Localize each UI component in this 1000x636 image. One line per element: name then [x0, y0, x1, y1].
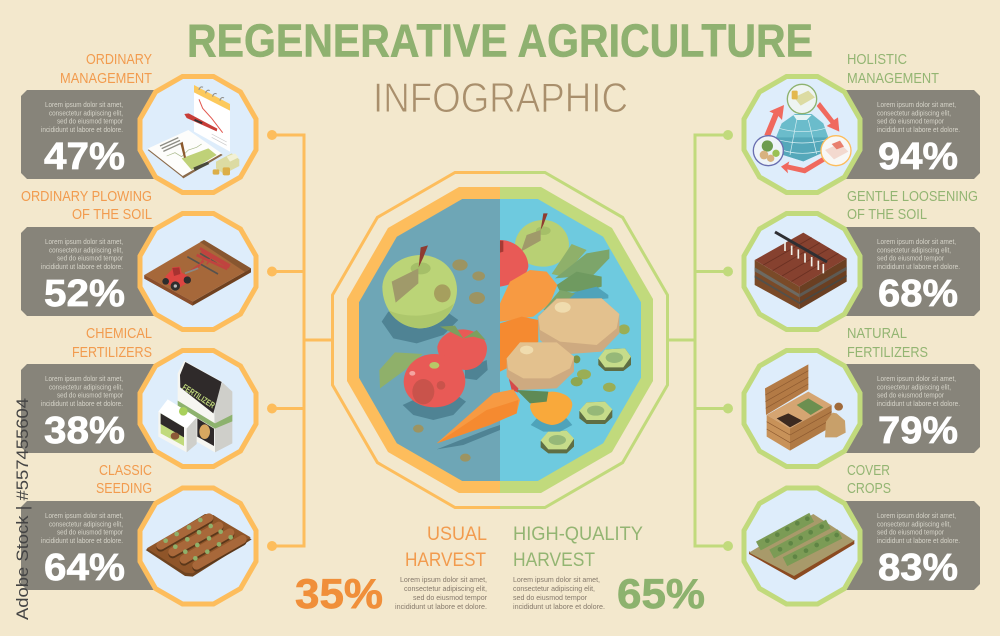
percentage: 52%: [44, 273, 125, 315]
icon frame: [744, 214, 860, 330]
icon: fertilizer bag and jug: FERTILIZER: [181, 382, 217, 411]
label: MANAGEMENT: [847, 71, 939, 87]
grey card: [21, 364, 160, 453]
icon: soil block with rake: [755, 232, 847, 309]
icon: tractor plowing field: [144, 240, 251, 306]
description: incididunt ut labore et dolore.: [877, 536, 960, 545]
description: [877, 237, 960, 271]
icon: crop field: [749, 514, 854, 580]
percentage: usual harvest: 35%: [295, 570, 383, 617]
percentage: 47%: [44, 136, 125, 178]
heading: usual harvest: USUAL: [427, 523, 487, 545]
description: sed do eiusmod tempor: [877, 254, 944, 262]
label: SEEDING: [96, 481, 152, 497]
icon frame: [140, 488, 256, 604]
text block: usual harvest: incididunt ut labore et dolore.: [395, 602, 487, 611]
percentage: high-quality harvest: 65%: [617, 570, 705, 617]
percentage: 94%: [878, 136, 958, 178]
label: HOLISTIC: [847, 52, 907, 68]
description: sed do eiusmod tempor: [877, 390, 944, 400]
text block: high-quality harvest: sed do eiusmod tempor: [513, 593, 588, 602]
description: consectetur adipiscing elit,: [49, 520, 123, 528]
stock id caption: Adobe Stock | #557455604: [13, 398, 32, 620]
description: sed do eiusmod tempor: [877, 116, 944, 126]
icon: compost box and sack: [765, 364, 846, 451]
description: [877, 511, 960, 545]
description: consectetur adipiscing elit,: [49, 382, 123, 392]
label: [72, 326, 152, 361]
label: ORDINARY PLOWING: [21, 189, 152, 205]
text block: high-quality harvest: incididunt ut labore et dolore.: [513, 602, 605, 611]
central harvest emblem: [332, 172, 668, 508]
label: OF THE SOIL: [847, 207, 927, 223]
text block: usual harvest: [395, 575, 488, 611]
description: incididunt ut labore et dolore.: [41, 536, 123, 545]
description: consectetur adipiscing elit,: [49, 246, 123, 254]
text block: usual harvest: Lorem ipsum dolor sit amet,: [400, 575, 487, 584]
panel: gentle loosening of the soil: [744, 189, 980, 330]
grey card: [21, 90, 160, 179]
heading: high-quality harvest: HIGH-QUALITY: [513, 523, 643, 545]
octagonal outer ring: high quality: [500, 172, 668, 508]
description: sed do eiusmod tempor: [57, 390, 123, 400]
label: [847, 463, 891, 497]
description: Lorem ipsum dolor sit amet,: [877, 374, 956, 383]
label: [847, 326, 928, 361]
grey card: [840, 364, 980, 453]
panel: cover crops: [744, 463, 980, 604]
percentage: 68%: [878, 273, 958, 315]
description: incididunt ut labore et dolore.: [41, 262, 123, 271]
description: sed do eiusmod tempor: [57, 254, 123, 262]
text block: high-quality harvest: [513, 575, 605, 611]
label: GENTLE LOOSENING: [847, 189, 978, 205]
percentage: 83%: [878, 547, 958, 589]
text block: usual harvest: consectetur adipiscing elit,: [404, 584, 487, 593]
label: ORDINARY: [86, 52, 152, 68]
description: incididunt ut labore et dolore.: [41, 399, 123, 408]
panel: chemical fertilizers: [21, 326, 256, 466]
text block: usual harvest: sed do eiusmod tempor: [413, 593, 488, 602]
description: Lorem ipsum dolor sit amet,: [45, 511, 123, 520]
left connector lines: [268, 132, 333, 550]
grey card: [840, 501, 980, 590]
description: sed do eiusmod tempor: [57, 528, 123, 536]
description: [877, 374, 960, 408]
description: Lorem ipsum dolor sit amet,: [45, 374, 123, 383]
icon: fertilizer bag and jug: [158, 361, 232, 452]
title: REGENERATIVE AGRICULTURE: [187, 14, 813, 66]
label: NATURAL: [847, 326, 907, 342]
icon: seed beds: [146, 514, 252, 577]
description: consectetur adipiscing elit,: [877, 382, 951, 392]
panel: natural fertilizers: [744, 326, 980, 466]
description: Lorem ipsum dolor sit amet,: [877, 100, 956, 109]
label: FERTILIZERS: [847, 345, 928, 361]
description: incididunt ut labore et dolore.: [877, 262, 960, 271]
grey card: [21, 501, 160, 590]
heading: usual harvest: [405, 523, 487, 571]
text block: high-quality harvest: Lorem ipsum dolor sit amet,: [513, 575, 600, 584]
label: MANAGEMENT: [60, 71, 152, 87]
icon frame: [744, 350, 860, 466]
description: [877, 100, 960, 134]
octagonal outer ring: usual: [332, 172, 500, 508]
description: consectetur adipiscing elit,: [49, 108, 123, 118]
description: consectetur adipiscing elit,: [877, 520, 951, 528]
panel: classic seeding: [21, 463, 256, 604]
heading: usual harvest: HARVEST: [405, 549, 486, 571]
description: sed do eiusmod tempor: [57, 116, 123, 126]
grey card: [840, 227, 980, 316]
icon frame: [140, 214, 256, 330]
label: CHEMICAL: [86, 326, 152, 342]
icon frame: [140, 76, 256, 192]
thick ring: high quality: [500, 187, 653, 493]
label: [847, 189, 978, 223]
percentage: 64%: [44, 547, 125, 589]
description: [41, 511, 123, 545]
heading: high-quality harvest: HARVEST: [513, 549, 595, 571]
heading: high-quality harvest: [513, 523, 643, 571]
illustration: low quality produce: [379, 245, 500, 462]
inner field: high quality: [500, 199, 641, 481]
right connector lines: [667, 132, 732, 550]
label: COVER: [847, 463, 890, 479]
thick ring: usual: [347, 187, 500, 493]
icon: notebook and chart: [148, 85, 239, 178]
label: CLASSIC: [99, 463, 152, 479]
description: incididunt ut labore et dolore.: [877, 399, 960, 408]
grey card: [21, 227, 160, 316]
label: [847, 52, 939, 87]
label: FERTILIZERS: [72, 345, 152, 361]
description: [41, 237, 123, 271]
subtitle: INFOGRAPHIC: [373, 74, 628, 121]
panel: ordinary management: [21, 52, 256, 192]
description: sed do eiusmod tempor: [877, 528, 944, 536]
illustration: high quality produce: [437, 213, 631, 453]
label: CROPS: [847, 481, 891, 497]
description: Lorem ipsum dolor sit amet,: [877, 511, 956, 520]
description: Lorem ipsum dolor sit amet,: [45, 237, 123, 246]
text block: high-quality harvest: consectetur adipiscing elit,: [513, 584, 595, 593]
description: incididunt ut labore et dolore.: [877, 125, 960, 134]
percentage: 38%: [44, 410, 125, 452]
label: [96, 463, 152, 497]
description: Lorem ipsum dolor sit amet,: [877, 237, 956, 246]
icon frame: [744, 488, 860, 604]
panel: holistic management: [744, 52, 980, 192]
icon: holistic cycle with dome: [753, 84, 851, 173]
icon frame: [744, 76, 860, 192]
grey card: [840, 90, 980, 179]
icon frame: [140, 350, 256, 466]
inner field: usual: [359, 199, 500, 481]
label: OF THE SOIL: [72, 207, 152, 223]
description: consectetur adipiscing elit,: [877, 108, 951, 118]
description: incididunt ut labore et dolore.: [41, 125, 123, 134]
description: [41, 100, 123, 134]
percentage: 79%: [878, 410, 958, 452]
description: [41, 374, 123, 408]
description: Lorem ipsum dolor sit amet,: [45, 100, 123, 109]
panel: ordinary plowing of the soil: [21, 189, 256, 330]
label: [21, 189, 152, 223]
label: [60, 52, 152, 87]
description: consectetur adipiscing elit,: [877, 246, 951, 254]
